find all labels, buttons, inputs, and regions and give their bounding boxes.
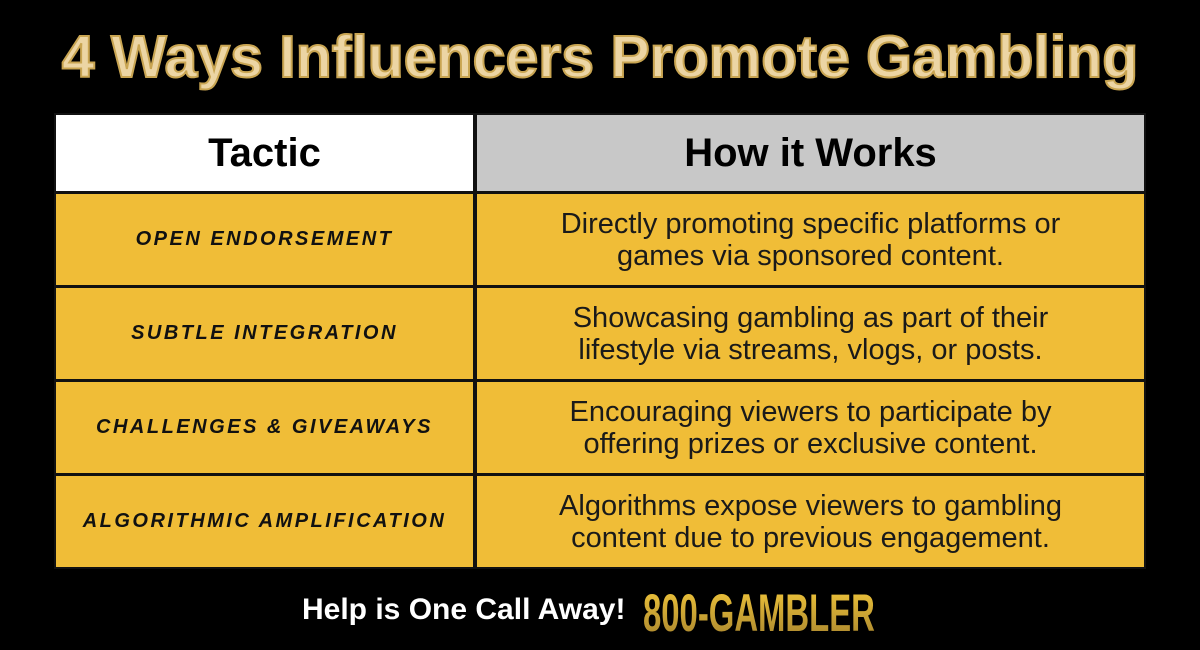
- row 3 description: [477, 382, 1144, 473]
- table: [54, 113, 1146, 569]
- title: 4 Ways Influencers Promote Gambling: [62, 24, 1138, 90]
- header: how it works: [477, 115, 1144, 191]
- row 3 tactic: [56, 382, 473, 473]
- header: how it works: How it Works: [684, 130, 937, 174]
- footer logo 800-GAMBLER: 800-GAMBLER: [643, 584, 875, 643]
- row 1 description: games via sponsored content.: [617, 240, 1004, 272]
- row 1 tactic: OPEN ENDORSEMENT: [136, 228, 393, 250]
- row 1 description: [477, 194, 1144, 285]
- row 3 description: Encouraging viewers to participate by: [570, 396, 1051, 428]
- row 2 tactic: [56, 288, 473, 379]
- row 4 description: Algorithms expose viewers to gambling: [559, 490, 1062, 522]
- row 3 tactic: CHALLENGES & GIVEAWAYS: [96, 416, 433, 438]
- row 4 tactic: ALGORITHMIC AMPLIFICATION: [83, 510, 446, 532]
- row 2 description: Showcasing gambling as part of their: [573, 302, 1048, 334]
- row 4 description: [477, 476, 1144, 567]
- footer help text: Help is One Call Away!: [302, 593, 625, 626]
- row 4 description: content due to previous engagement.: [571, 522, 1050, 554]
- row 2 tactic: SUBTLE INTEGRATION: [131, 322, 398, 344]
- header: tactic: Tactic: [208, 130, 321, 174]
- row 3 description: offering prizes or exclusive content.: [583, 428, 1038, 460]
- row 2 description: lifestyle via streams, vlogs, or posts.: [578, 334, 1043, 366]
- row 1 description: Directly promoting specific platforms or: [561, 208, 1060, 240]
- row 1 tactic: [56, 194, 473, 285]
- header: tactic: [56, 115, 473, 191]
- row 2 description: [477, 288, 1144, 379]
- row 4 tactic: [56, 476, 473, 567]
